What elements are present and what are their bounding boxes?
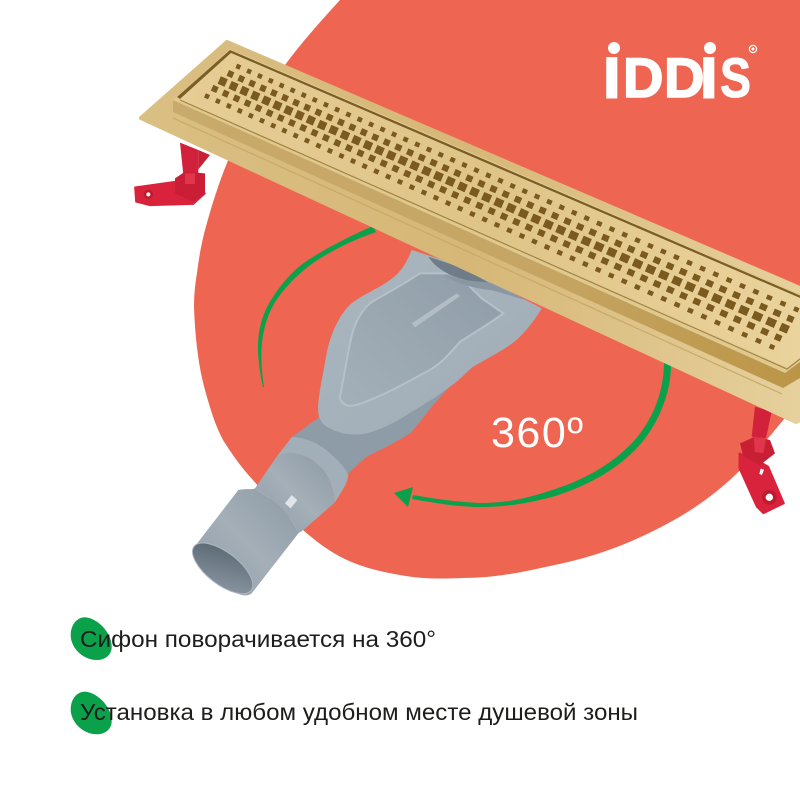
drain collar [428, 257, 490, 283]
logo: IDDIS: I [701, 46, 717, 109]
text: installation: Установка в любом удобном месте душевой зоны [80, 699, 638, 725]
background blob [194, 0, 800, 579]
logo: IDDIS: S [720, 46, 751, 109]
frame front face [173, 100, 800, 388]
main body [318, 250, 542, 435]
grate lower edge [180, 100, 800, 369]
pipe mouth [184, 534, 261, 603]
bullet 2 [71, 692, 638, 734]
arrow: right rotation arc with head [394, 362, 671, 507]
gold drain channel [141, 42, 800, 422]
logo: IDDIS [604, 42, 757, 109]
groove [177, 50, 800, 298]
central rib [412, 293, 460, 327]
pipe highlight [285, 495, 297, 508]
pipe collar [277, 437, 348, 502]
grate surface [180, 53, 800, 368]
bullet 1 [71, 617, 436, 660]
crease below frame [173, 118, 782, 394]
icon: green bullet blob 2 [71, 692, 112, 734]
text: swivel: Сифон поворачивается на 360° [80, 626, 436, 652]
middle pipe section [255, 453, 335, 533]
logo: IDDIS: I [604, 46, 620, 109]
flange [141, 42, 800, 422]
icon: green bullet blob 1 [71, 617, 112, 660]
logo: IDDIS: D [664, 46, 704, 109]
inner recessed panel [340, 273, 503, 406]
icon: right red mounting leg [739, 407, 784, 513]
lower pipe shell [193, 488, 298, 595]
grate perforations [205, 66, 799, 348]
arrow: left rotation arc [258, 226, 376, 387]
siphon body and outlet pipe [184, 250, 542, 603]
frame top rim [173, 49, 800, 373]
label: 360 degrees: 360º [491, 409, 583, 457]
lower body shadow [290, 387, 450, 473]
logo: IDDIS: D [623, 46, 663, 109]
icon: left red mounting leg [135, 143, 210, 205]
